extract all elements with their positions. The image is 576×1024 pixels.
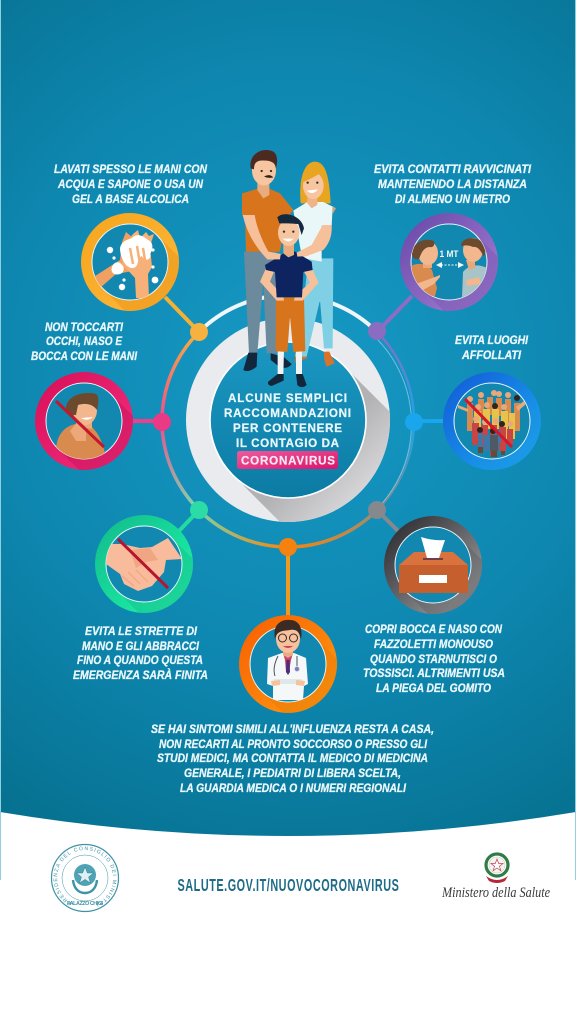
text: avoid crowds: AFFOLLATI <box>461 348 522 362</box>
text: flu-like symptoms: LA GUARDIA MEDICA O I NUMERI REGIONALI <box>180 781 407 795</box>
icon: do not touch face <box>35 372 133 470</box>
text: cover mouth and nose: TOSSISCI. ALTRIMENTI USA <box>363 666 505 680</box>
text: flu-like symptoms: NON RECARTI AL PRONTO SOCCORSO O PRESSO GLI <box>159 737 428 751</box>
text: keep distance: EVITA CONTATTI RAVVICINATI <box>374 162 532 176</box>
ring nodes <box>153 322 423 556</box>
logo: Presidenza del Consiglio seal: PALAZZO CHIGI <box>67 901 104 907</box>
crowd people <box>458 390 526 457</box>
text: cover mouth and nose: COPRI BOCCA E NASO CON <box>365 622 502 636</box>
icon: keep one metre distance <box>400 213 498 311</box>
text: wash hands: LAVATI SPESSO LE MANI CON <box>54 162 207 176</box>
footer white band <box>0 812 576 1024</box>
icon: washing hands <box>81 213 179 311</box>
text: wash hands: GEL A BASE ALCOLICA <box>72 192 189 206</box>
title: RACCOMANDAZIONI <box>224 407 351 420</box>
text: flu-like symptoms <box>151 722 434 795</box>
title <box>224 392 351 469</box>
icon: keep one metre distance: 1 MT <box>440 249 459 259</box>
ring network with connectors <box>133 295 444 616</box>
text: avoid handshakes <box>73 624 208 682</box>
text: do not touch: NON TOCCARTI <box>45 320 124 334</box>
icon: doctor <box>239 615 337 713</box>
text: avoid handshakes: EMERGENZA SARÀ FINITA <box>73 668 208 682</box>
text: do not touch: OCCHI, NASO E <box>46 334 123 348</box>
text: avoid handshakes: FINO A QUANDO QUESTA <box>77 653 203 667</box>
text: do not touch: BOCCA CON LE MANI <box>31 349 138 363</box>
woman <box>293 162 336 367</box>
text: avoid crowds <box>455 333 529 362</box>
title: ALCUNE SEMPLICI <box>228 392 347 405</box>
title: CORONAVIRUS <box>241 454 335 468</box>
logo: Ministero della Salute: Ministero della Salute <box>441 885 550 901</box>
text: flu-like symptoms: STUDI MEDICI, MA CONTATTA IL MEDICO DI MEDICINA <box>157 751 428 765</box>
text: keep distance <box>374 162 532 206</box>
title: PER CONTENERE <box>233 422 342 435</box>
icon: tissue box <box>384 516 482 614</box>
text: cover mouth and nose: QUANDO STARNUTISCI O <box>370 652 497 666</box>
text: avoid handshakes: EVITA LE STRETTE DI <box>85 624 198 638</box>
text: wash hands: ACQUA E SAPONE O USA UN <box>57 177 203 191</box>
boy <box>260 214 319 387</box>
text: flu-like symptoms: GENERALE, I PEDIATRI DI LIBERA SCELTA, <box>184 766 401 780</box>
text: flu-like symptoms: SE HAI SINTOMI SIMILI ALL'INFLUENZA RESTA A CASA, <box>151 722 434 736</box>
icon: handshake <box>95 515 193 613</box>
central circle <box>186 318 390 522</box>
website url: SALUTE.GOV.IT/NUOVOCORONAVIRUS <box>178 877 399 896</box>
logo: Ministero della Salute <box>441 854 550 901</box>
text: cover mouth and nose: FAZZOLETTI MONOUSO <box>374 637 493 651</box>
title: IL CONTAGIO DA <box>236 437 340 450</box>
logo: Presidenza del Consiglio seal: PRESIDENZA DEL CONSIGLIO DEI MINISTRI <box>54 846 117 907</box>
text: keep distance: DI ALMENO UN METRO <box>395 192 510 206</box>
icon: crowded places <box>443 372 541 470</box>
text: wash hands <box>54 162 207 206</box>
text: keep distance: MANTENENDO LA DISTANZA <box>378 177 527 191</box>
text: cover mouth and nose <box>363 622 505 695</box>
man <box>242 150 293 371</box>
text: cover mouth and nose: LA PIEGA DEL GOMITO <box>376 681 491 695</box>
illustration: family <box>242 150 336 387</box>
text: avoid crowds: EVITA LUOGHI <box>455 333 529 347</box>
text: do not touch <box>31 320 138 363</box>
parent hands on the boy <box>267 251 308 259</box>
text: avoid handshakes: MANO E GLI ABBRACCI <box>82 639 200 653</box>
